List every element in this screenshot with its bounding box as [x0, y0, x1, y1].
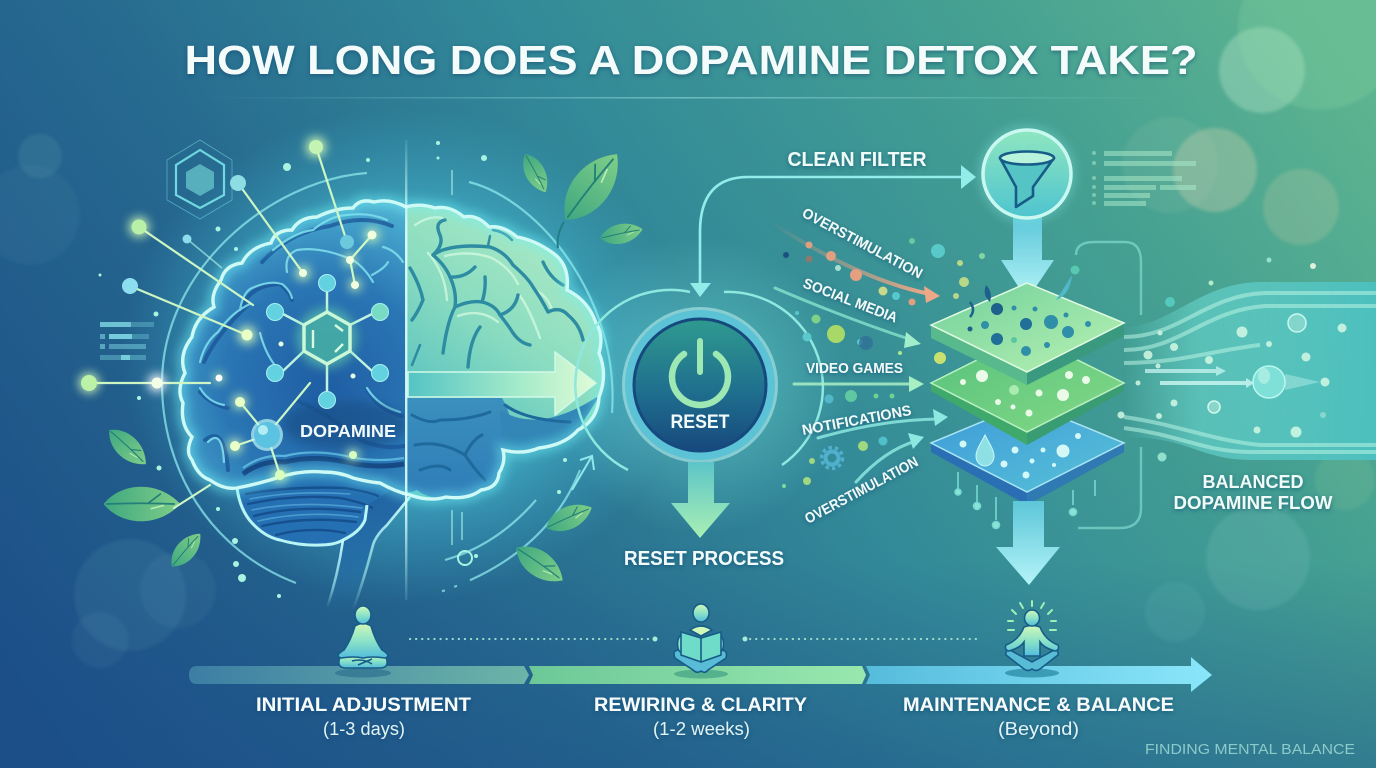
- decorative particles near brain: [98, 141, 594, 598]
- stage labels: [256, 695, 1174, 739]
- arrow: plates down: [996, 501, 1060, 585]
- reset button: [575, 290, 823, 470]
- stage labels: (1-2 weeks): [653, 719, 750, 739]
- balanced dopamine flow label: BALANCED: [1202, 471, 1304, 492]
- icon: gear: [822, 448, 842, 468]
- divider line: [405, 140, 407, 600]
- data lines near filter: [1092, 151, 1196, 206]
- dopamine label: DOPAMINE: [300, 421, 396, 441]
- title: HOW LONG DOES A DOPAMINE DETOX TAKE?: [184, 37, 1198, 83]
- stage labels: INITIAL ADJUSTMENT: [256, 695, 471, 716]
- brain glow: [120, 105, 850, 605]
- icon: hexagon: [167, 140, 232, 219]
- icon: filter funnel: [978, 125, 1076, 223]
- filter plates: [189, 266, 1355, 758]
- plate: middle green: [931, 335, 1124, 445]
- orbit arcs around brain: [162, 173, 613, 592]
- drips: [955, 472, 1095, 528]
- balanced dopamine flow label: [1174, 471, 1333, 513]
- stage labels: MAINTENANCE & BALANCE: [903, 695, 1174, 716]
- reset rings: [575, 290, 823, 470]
- balanced dopamine flow label: DOPAMINE FLOW: [1174, 492, 1333, 513]
- leaves: [102, 143, 645, 591]
- stream labels: VIDEO GAMES: [806, 360, 903, 377]
- plate: bottom blue: [931, 403, 1124, 505]
- stage 2 person: [674, 604, 728, 678]
- plate: top green: [931, 266, 1124, 385]
- stream labels: [799, 205, 925, 528]
- reset button: RESET: [670, 412, 730, 433]
- input streams: [770, 205, 985, 528]
- left hemisphere: [182, 202, 406, 492]
- stage labels: (Beyond): [998, 719, 1079, 739]
- stream arrows: [770, 222, 948, 482]
- flow sphere: [1253, 366, 1285, 398]
- arrow: brain to reset: [408, 352, 596, 415]
- debris: [970, 266, 1080, 317]
- stage 1 person: [335, 606, 391, 678]
- timeline bar: [189, 657, 1212, 692]
- flow bubbles: [1118, 258, 1346, 462]
- balanced flow stream: [1118, 258, 1376, 462]
- dopamine molecule: [266, 274, 388, 408]
- stream labels: SOCIAL MEDIA: [801, 276, 900, 327]
- stage labels: REWIRING & CLARITY: [594, 695, 807, 716]
- dotted connectors: [410, 638, 979, 640]
- arrow: reset down: [671, 462, 730, 538]
- dopamine network: [79, 137, 379, 508]
- timeline: [189, 601, 1212, 739]
- stage labels: (1-3 days): [323, 719, 405, 739]
- stream labels: OVERSTIMULATION: [799, 205, 925, 282]
- arrow: reset to filter: [690, 165, 976, 297]
- footer note: FINDING MENTAL BALANCE: [1145, 742, 1355, 758]
- clean filter label: CLEAN FILTER: [788, 149, 927, 171]
- stream labels: OVERSTIMULATION: [802, 454, 921, 528]
- cerebellum and stem: [237, 472, 412, 612]
- brackets: [1076, 242, 1141, 528]
- brain: [170, 190, 616, 612]
- arrow: filter to plates: [1001, 216, 1054, 300]
- stage 3 person: [1005, 601, 1059, 678]
- icon: power: [672, 341, 728, 405]
- dopamine sphere: [251, 419, 283, 451]
- mini data bars left: [100, 322, 154, 360]
- reset process label: RESET PROCESS: [624, 548, 784, 570]
- stream particles: [782, 238, 985, 488]
- stream labels: NOTIFICATIONS: [801, 403, 913, 439]
- brain outline: [180, 201, 604, 499]
- right hemisphere: [406, 206, 602, 498]
